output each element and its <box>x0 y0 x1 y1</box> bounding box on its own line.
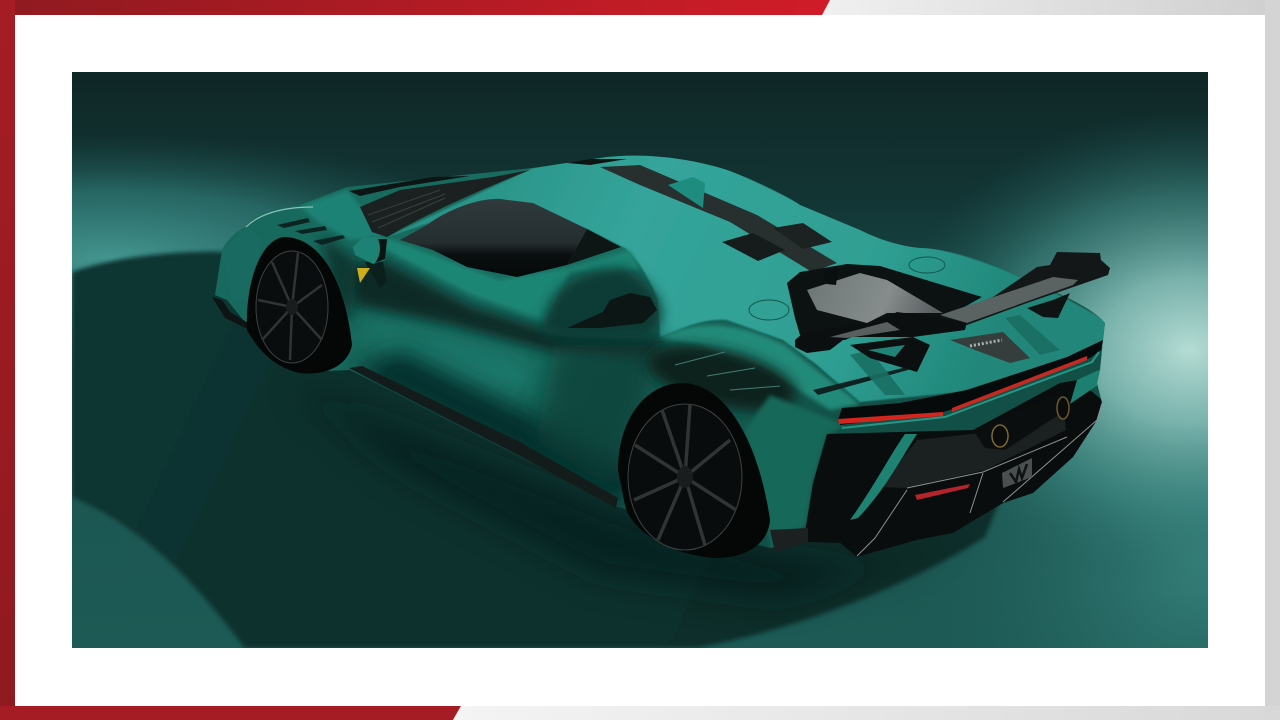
plate logo <box>1010 464 1027 482</box>
roof and rear deck surface <box>387 154 1108 402</box>
floor shadow <box>72 252 1000 648</box>
deck reflections <box>850 315 1060 395</box>
wing left grey blade <box>830 322 900 338</box>
wing grey blade <box>940 277 1078 323</box>
nose side panel <box>222 228 262 300</box>
door panel light <box>386 336 518 390</box>
rear fin highlight <box>850 434 917 520</box>
left deck vent <box>722 233 785 261</box>
haunch highlight <box>660 325 860 410</box>
rear fog light <box>915 484 970 500</box>
side intake <box>567 293 657 328</box>
rear bumper black area <box>800 380 1110 560</box>
left wing plate <box>795 312 967 353</box>
rear right fender <box>1070 369 1101 404</box>
number plate <box>1002 458 1032 488</box>
left wing support <box>850 337 930 372</box>
teal gap in support <box>868 345 905 357</box>
fender highlight line <box>246 207 313 227</box>
frame: bottom bar grey <box>453 706 1280 720</box>
door shoulder light band <box>385 238 640 322</box>
deck badge slats <box>970 340 1002 346</box>
haunch dark over vents <box>642 336 804 418</box>
rear taillight left <box>838 412 943 424</box>
rear deck stripe <box>950 332 1030 363</box>
diffuser lines <box>857 403 1102 556</box>
snorkel <box>823 268 838 285</box>
frame: top bar grey <box>822 0 1280 15</box>
rear upper lip <box>838 340 1103 425</box>
right wing plate <box>940 252 1110 325</box>
engine cover glass <box>807 273 943 323</box>
front wheel <box>247 237 352 374</box>
exhausts <box>973 392 1069 450</box>
windshield and vent <box>360 170 530 237</box>
side window <box>400 199 587 277</box>
car body <box>215 156 1105 557</box>
rear taillight right <box>952 356 1087 412</box>
side splitter block <box>770 528 808 552</box>
frame: top bar red <box>0 0 830 15</box>
door shoulder dark band <box>345 258 665 362</box>
vent slats <box>368 190 445 228</box>
rear arch and tyre <box>618 383 770 558</box>
front bumper splitter <box>212 297 254 332</box>
wing mirror stalk <box>365 262 387 288</box>
mirror back <box>375 239 387 263</box>
frame: right bar grey <box>1265 0 1280 720</box>
rear quarter panel <box>745 395 845 550</box>
right deck vent <box>773 223 832 249</box>
lower door shadow <box>350 350 640 510</box>
car <box>212 154 1110 560</box>
frame: bottom bar red <box>0 706 461 720</box>
roof stripe <box>600 165 837 272</box>
haunch vents <box>675 352 780 390</box>
roof fin <box>668 177 705 208</box>
engine cover surround <box>787 264 982 340</box>
front fender upper light <box>300 190 385 240</box>
shadow around side intake <box>540 268 662 338</box>
front arch <box>247 237 352 374</box>
side skirt <box>349 366 618 508</box>
teal line below lip <box>842 352 1099 428</box>
front fender dark <box>320 235 356 325</box>
window rear triangle <box>567 229 621 265</box>
rear door shadow <box>534 348 658 478</box>
right wing support <box>1027 293 1070 318</box>
rear wheel <box>618 383 770 558</box>
front fender vents <box>277 218 345 245</box>
carbon mesh <box>884 416 1066 488</box>
frame: left bar red <box>0 0 15 720</box>
photo: green supercar in studio <box>72 72 1208 648</box>
wing mirror <box>353 237 387 264</box>
wing shadow on deck <box>813 365 915 395</box>
studio backdrop <box>72 72 1208 648</box>
rear wing <box>795 252 1110 372</box>
top slit vents <box>349 159 627 196</box>
yellow badge <box>357 268 370 283</box>
deck filler caps <box>749 257 945 320</box>
